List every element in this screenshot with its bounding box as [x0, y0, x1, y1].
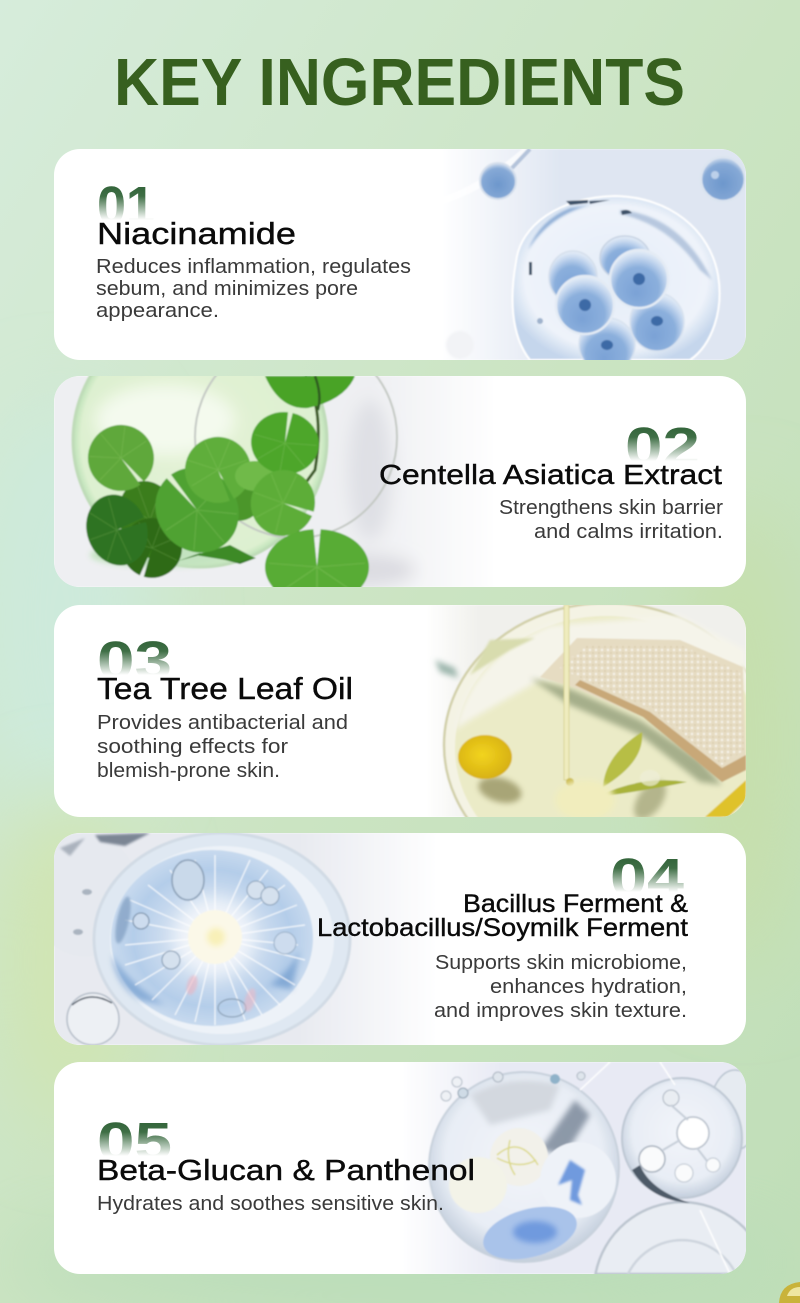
- description: [96, 256, 411, 322]
- number 02: 02: [625, 417, 700, 477]
- description: and improves skin texture.: [434, 1000, 687, 1022]
- image: centella leaves in glass dish: [54, 376, 436, 587]
- description: sebum, and minimizes pore: [96, 278, 358, 300]
- description: [434, 952, 687, 1022]
- panel: Bacillus Ferment: [30, 833, 746, 1045]
- number 03: 03: [97, 631, 172, 691]
- description: soothing effects for: [97, 736, 288, 758]
- panel: Tea Tree Leaf Oil: [54, 605, 746, 817]
- panel: Centella Asiatica Extract: [54, 376, 746, 587]
- heading: Lactobacillus/Soymilk Ferment: [317, 914, 688, 942]
- description: [97, 712, 348, 782]
- number 01: 01: [97, 176, 155, 236]
- heading: Centella Asiatica Extract: [379, 459, 722, 490]
- description: Strengthens skin barrier: [499, 497, 723, 519]
- description: Reduces inflammation, regulates: [96, 256, 411, 278]
- number 04: 04: [610, 848, 684, 908]
- image: oil pouring in glass dish: [432, 605, 746, 817]
- heading: [317, 890, 688, 942]
- heading: Bacillus Ferment &: [463, 890, 688, 918]
- image: cell cluster in water bubble: [440, 149, 746, 372]
- description: [499, 497, 723, 543]
- description: enhances hydration,: [490, 976, 687, 998]
- title: KEY INGREDIENTS: [114, 45, 685, 120]
- description: Provides antibacterial and: [97, 712, 348, 734]
- panel: Niacinamide: [54, 149, 746, 372]
- number 05: 05: [97, 1112, 172, 1172]
- description: Hydrates and soothes sensitive skin.: [97, 1193, 444, 1215]
- description: appearance.: [96, 300, 219, 322]
- heading: Beta-Glucan & Panthenol: [97, 1155, 475, 1187]
- image: glass molecule spheres: [427, 1062, 746, 1274]
- heading: Tea Tree Leaf Oil: [97, 671, 353, 706]
- description: and calms irritation.: [534, 521, 723, 543]
- icon: corner fruit fragment: [779, 1282, 800, 1303]
- description: Supports skin microbiome,: [435, 952, 687, 974]
- description: blemish-prone skin.: [97, 760, 280, 782]
- image: microbe sphere: [54, 833, 389, 1045]
- heading: Niacinamide: [97, 216, 296, 251]
- panel: Beta-Glucan & Panthenol: [54, 1062, 768, 1274]
